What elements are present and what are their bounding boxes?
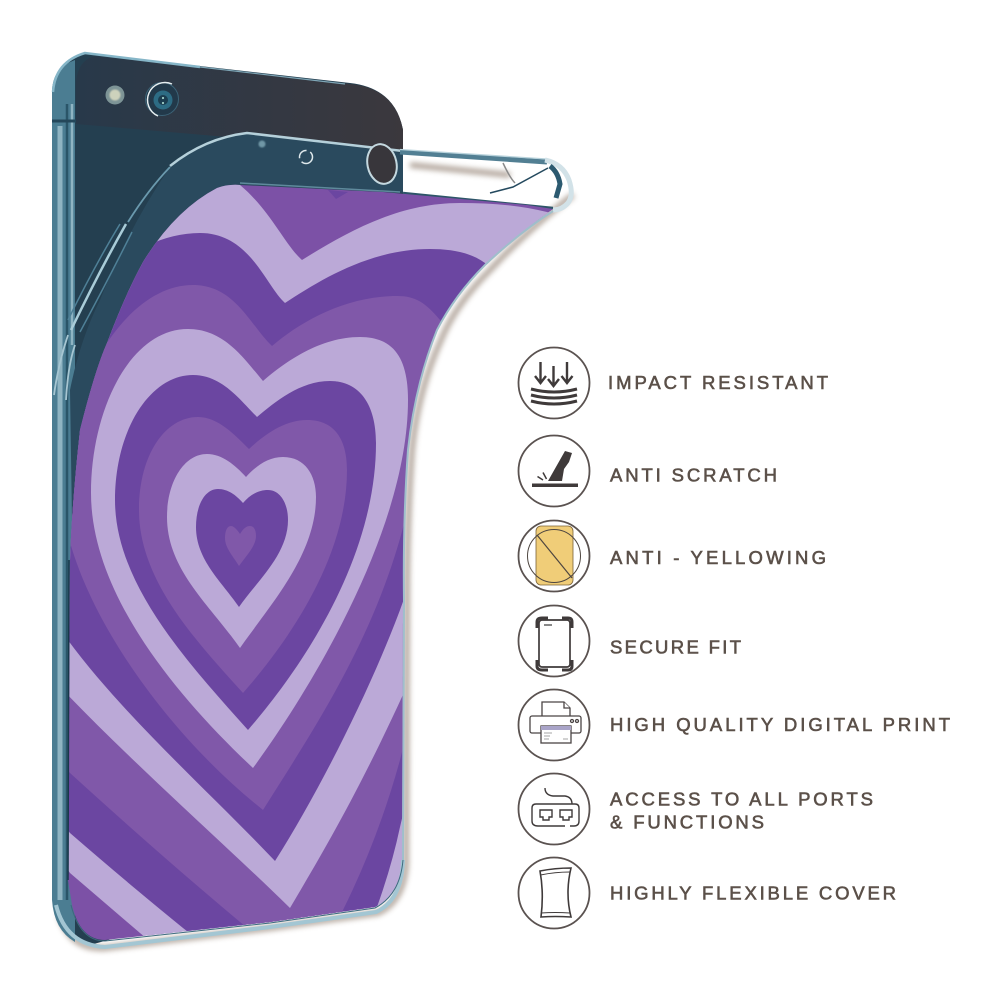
label: IMPACT RESISTANT	[608, 372, 828, 393]
icon: ports	[532, 788, 579, 826]
case flash hole	[300, 150, 312, 164]
heart band: dark inner	[115, 375, 376, 730]
label: ACCESS TO ALL PORTS	[610, 788, 873, 810]
label	[610, 788, 873, 832]
case edge rim	[56, 211, 553, 947]
icon: blade on surface	[532, 451, 578, 487]
phone back	[52, 53, 403, 945]
icon: camera lens	[146, 82, 178, 116]
feature: anti scratch	[518, 436, 777, 506]
icon: yellow case crossed	[528, 526, 580, 585]
label: ANTI SCRATCH	[610, 464, 777, 486]
phone and case shadow	[60, 165, 573, 948]
heart band: outer light	[69, 184, 548, 908]
feature: anti yellowing	[518, 520, 826, 592]
label: HIGHLY FLEXIBLE COVER	[610, 882, 896, 904]
upper dark camera band	[76, 56, 403, 152]
label: ANTI - YELLOWING	[610, 547, 826, 568]
printed heart pattern	[68, 184, 553, 940]
side bezel	[52, 60, 75, 942]
heart band: dark	[70, 233, 486, 861]
heart band: medium inner	[139, 417, 347, 693]
icon: printer	[530, 702, 581, 743]
heart band: dark core	[196, 489, 288, 607]
icon: arrows and layers	[531, 362, 577, 404]
case side button	[71, 224, 126, 330]
heart band: medium	[62, 285, 446, 810]
heart band: light	[91, 329, 408, 768]
feature: impact resistant	[518, 348, 828, 418]
top notch mark	[328, 190, 348, 199]
feature: access to all ports	[518, 774, 873, 844]
heart band: light inner	[167, 454, 316, 648]
feature: high quality digital print	[518, 690, 950, 760]
label: SECURE FIT	[610, 636, 741, 658]
icon: phone with bumpers	[537, 618, 572, 670]
case corner rim	[403, 160, 571, 210]
clear case upper band	[54, 133, 547, 520]
icon: bent cover	[540, 868, 571, 917]
heart centre	[225, 526, 256, 566]
feature: secure fit	[518, 606, 741, 676]
label: & FUNCTIONS	[610, 812, 764, 832]
icon: flash	[106, 86, 124, 104]
label: HIGH QUALITY DIGITAL PRINT	[610, 714, 950, 735]
case camera hole	[364, 141, 400, 187]
feature: highly flexible cover	[518, 858, 896, 928]
